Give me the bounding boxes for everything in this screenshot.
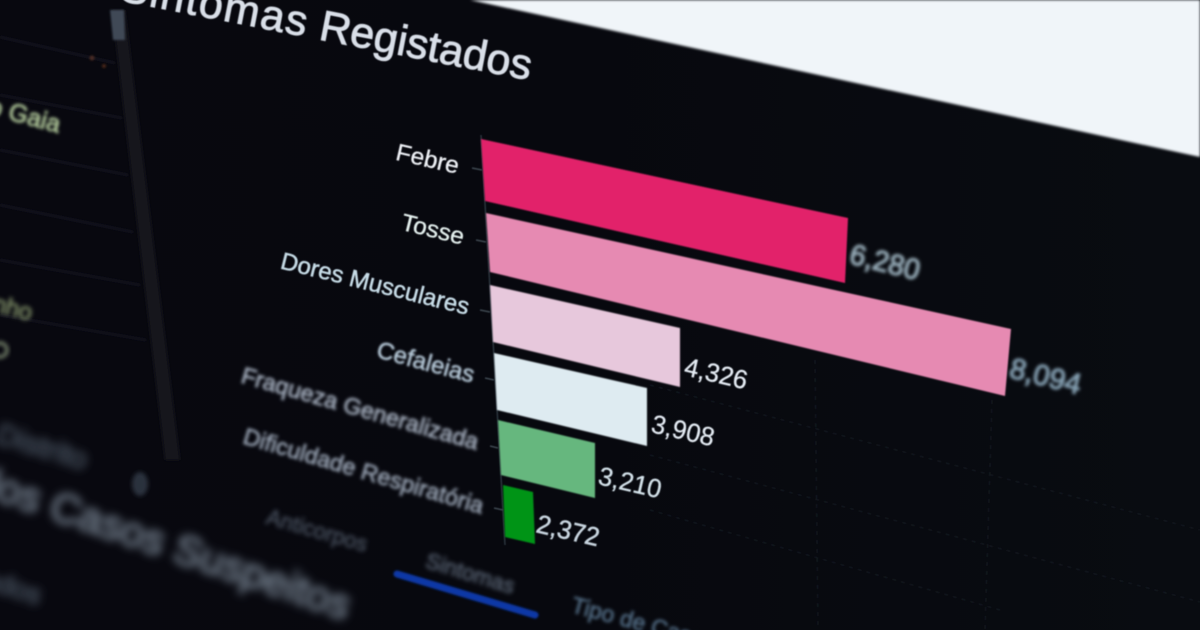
value: 4,326: 4,326 [682,354,750,395]
bar: Dores Musculares [490,285,680,387]
label: Dores Musculares: Dores Musculares [278,248,472,321]
bar: Dificuldade Respiratória [503,485,535,544]
chart: horizontal bars [481,139,1011,544]
bar: Febre [481,139,848,283]
bar: Fraqueza Generalizada [498,420,595,498]
value: 3,908: 3,908 [649,411,717,452]
value: 6,280: 6,280 [846,239,923,287]
label: Fraqueza Generalizada: Fraqueza Generalizada [239,362,483,455]
sidebar icon: blurred chevron [132,472,148,496]
axis line [481,135,505,545]
value: 3,210: 3,210 [596,463,664,504]
sidebar scrollbar track [112,10,180,460]
value: 2,372: 2,372 [534,511,602,552]
sidebar scrollbar thumb [110,10,125,40]
chart grid lines [650,360,1200,630]
panel: left sidebar [0,10,180,496]
bar: Tosse [486,213,1011,396]
label: Cefaleias: Cefaleias [374,337,477,389]
label: Anticorpos: Anticorpos [264,504,371,557]
value labels [534,239,1084,552]
sidebar icon: blurred ring [0,343,7,357]
label: Tosse: Tosse [398,209,467,251]
label: Dificuldade Respiratória: Dificuldade Respiratória [240,423,488,519]
active tab indicator [397,574,535,615]
value: 8,094: 8,094 [1006,353,1084,401]
label: Febre: Febre [393,139,462,180]
category labels [239,139,488,557]
bar: Cefaleias [494,353,647,446]
tab: Sintomas: Sintomas [423,548,518,599]
axis ticks [472,168,503,510]
bright area above the screen [470,0,1200,157]
sidebar marker dots [90,56,106,68]
